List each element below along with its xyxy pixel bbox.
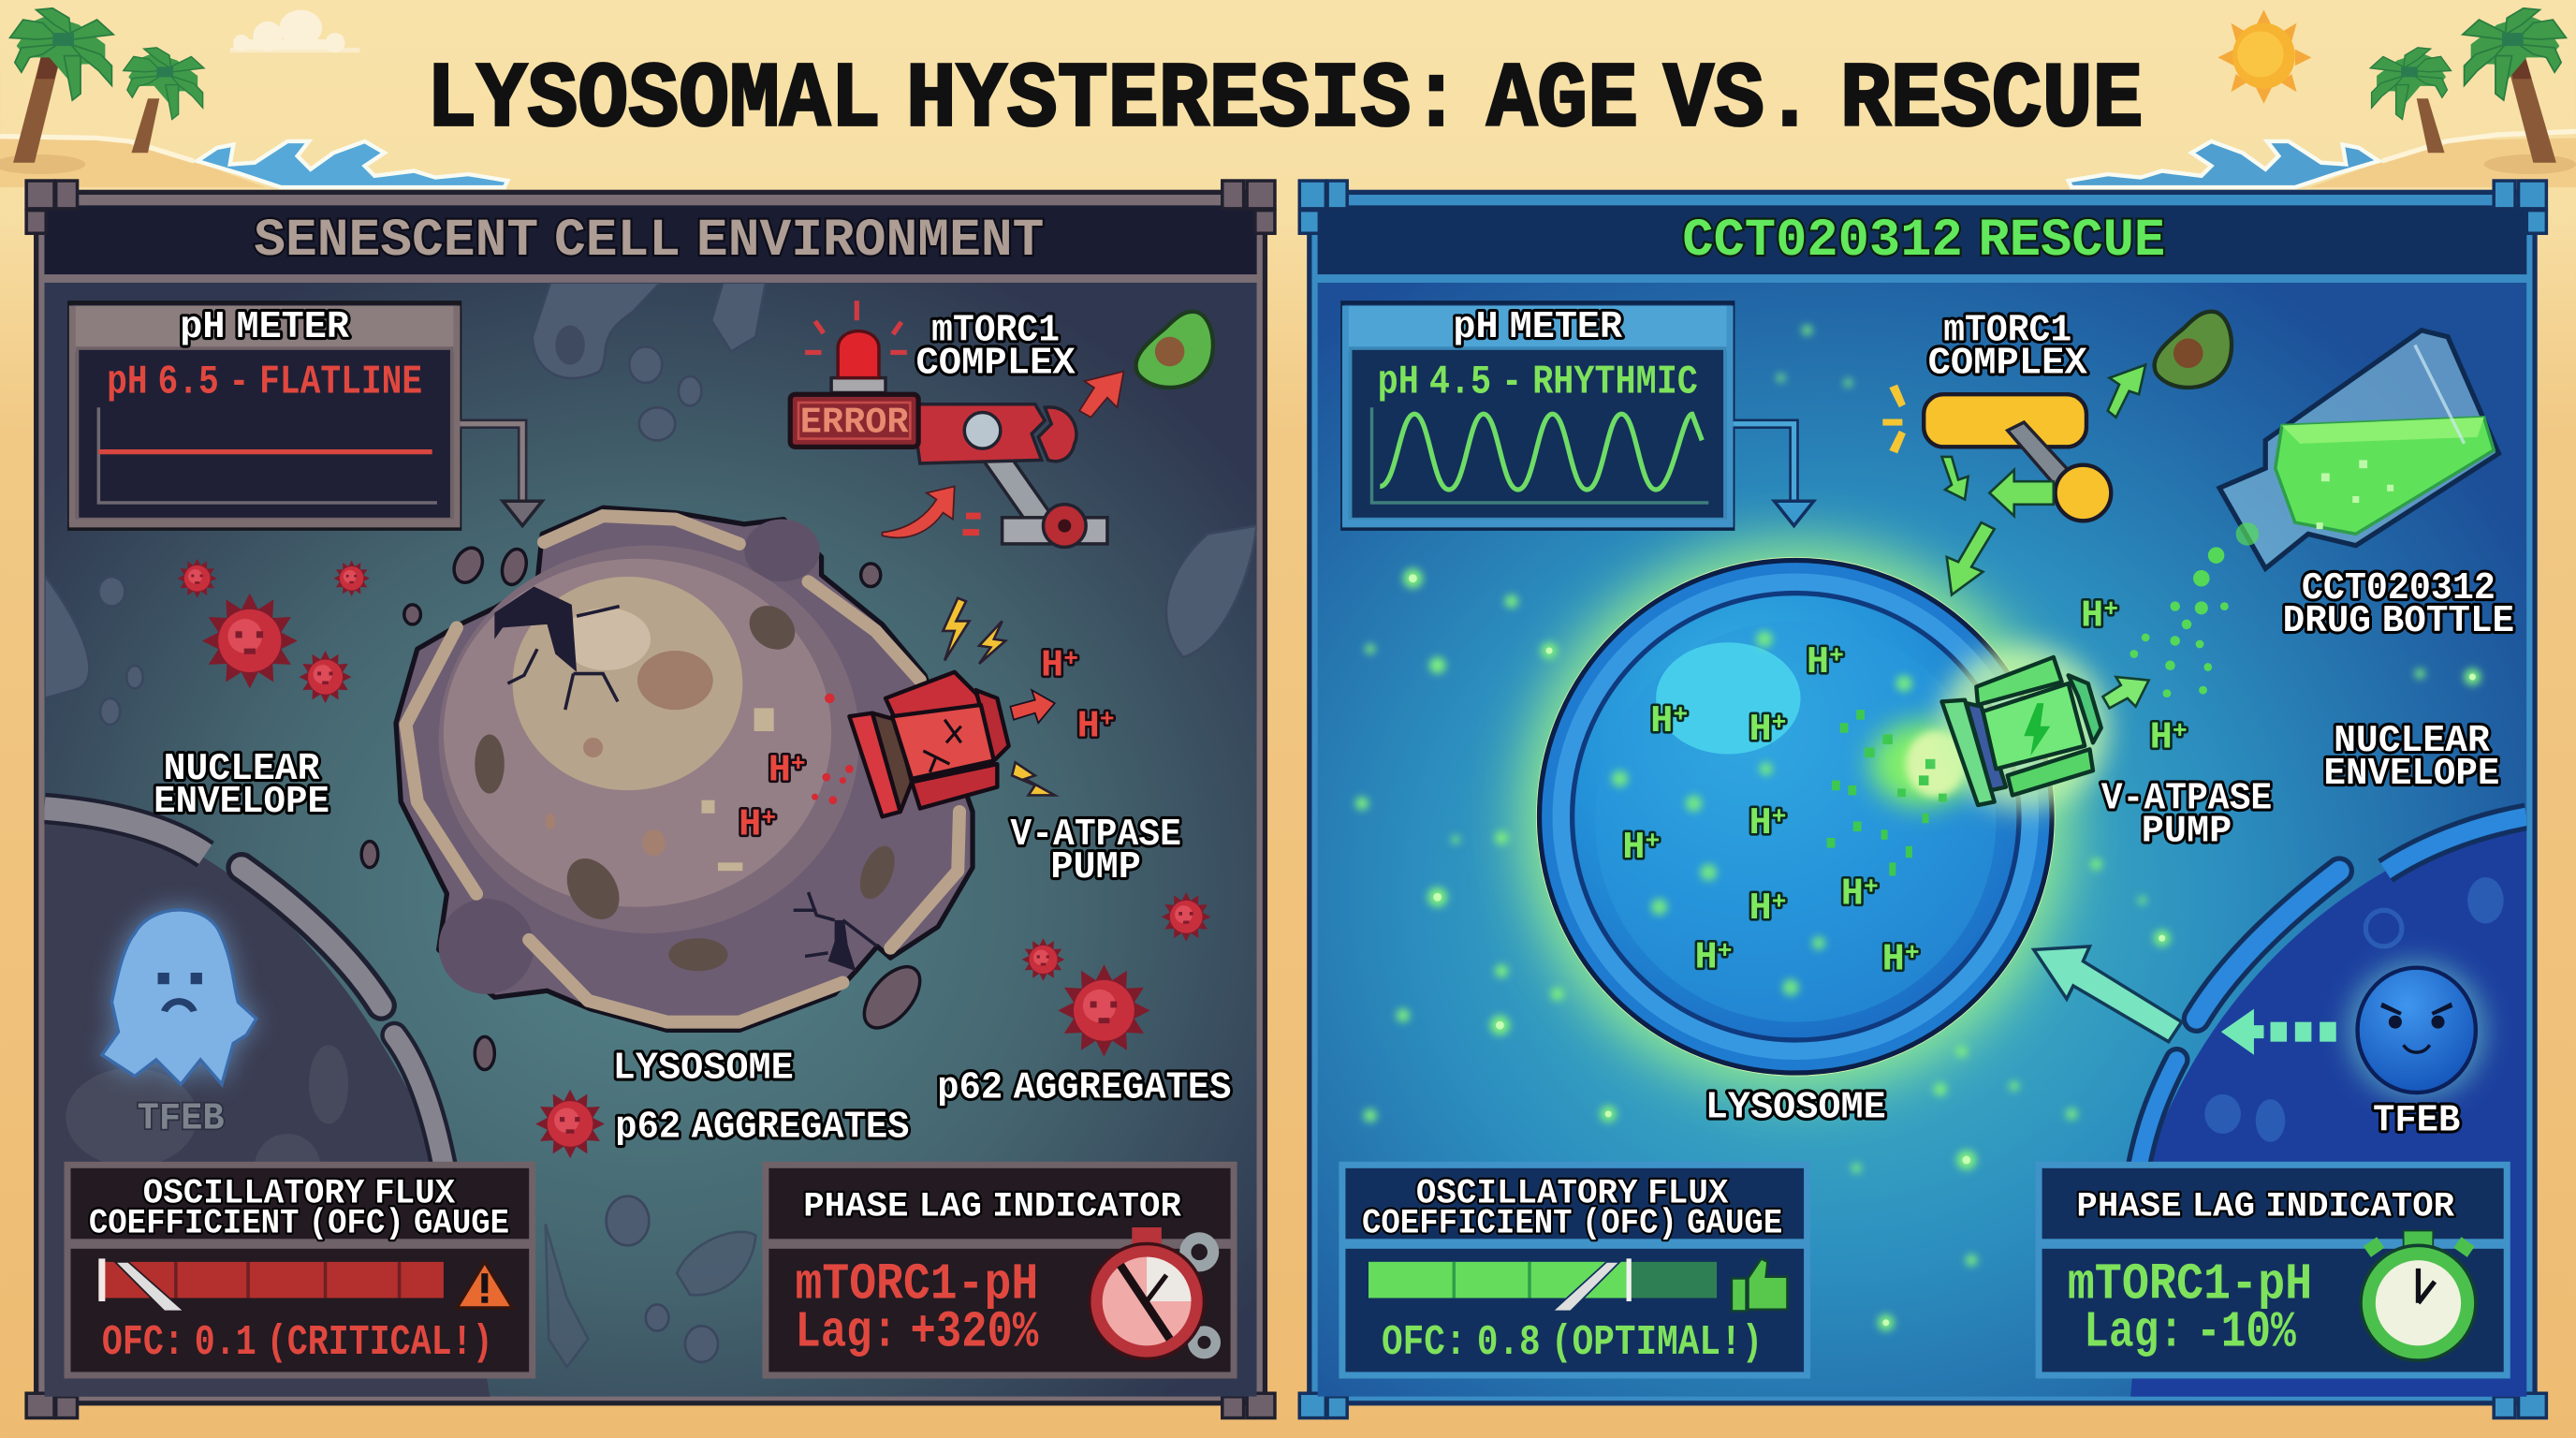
icon: sad ghost tfeb: [102, 910, 256, 1084]
heading: senescent: SENESCENT CELL ENVIRONMENT: [254, 211, 1044, 271]
red arrows: [883, 372, 1123, 537]
labels left: p62 AGGREGATES: [615, 1106, 909, 1149]
palm tree large right: [2463, 8, 2566, 163]
palm tree small left: [124, 48, 204, 153]
labels left: NUCLEAR: [164, 748, 320, 791]
palm tree large left: [10, 8, 113, 163]
proton spray: [1612, 631, 1975, 996]
tfeb label dim: TFEB: [138, 1098, 225, 1141]
error badge: [790, 394, 918, 447]
h+ labels inside: H: [1807, 641, 1829, 684]
phase lag indicator left: PHASE LAG INDICATOR: [803, 1188, 1182, 1227]
h+ labels outside: +: [2103, 595, 2118, 624]
h+ labels left: H: [739, 804, 761, 847]
floating green particles: [1355, 325, 2481, 1331]
h+ labels left: [739, 644, 1115, 847]
labels left: [154, 748, 1231, 1149]
lysosome left: [361, 507, 973, 1070]
cracks: [494, 587, 877, 971]
h+ labels inside: H: [1695, 937, 1718, 980]
ofc gauge right: [1342, 1165, 1808, 1375]
labels right: LYSOSOME: [1705, 1086, 1886, 1129]
ph meter left: pH 6.5 - FLATLINE: [107, 359, 422, 405]
mtorc1 label left: COMPLEX: [915, 342, 1076, 385]
icon: thumbs up: [1732, 1258, 1788, 1312]
labels left: LYSOSOME: [613, 1047, 794, 1090]
h+ labels left: +: [791, 750, 806, 778]
ph meter left: [69, 302, 460, 529]
beach scene right: [2069, 8, 2576, 187]
phase lag indicator right: Lag: -10%: [2084, 1304, 2296, 1361]
h+ labels inside: H: [1749, 888, 1772, 931]
error badge: ERROR: [800, 403, 909, 444]
mtorc1 label right: mTORC1: [1943, 309, 2071, 352]
labels left: V-ATPASE: [1010, 814, 1181, 857]
drug bottle: [2219, 330, 2498, 568]
panel: senescent cell environment: [26, 181, 1275, 1418]
ofc gauge left: OFC: 0.1 (CRITICAL!): [102, 1318, 493, 1367]
arrow: nucleus to lysosome: [2034, 946, 2182, 1042]
h+ labels left: +: [1100, 706, 1115, 734]
labels right: PUMP: [2142, 811, 2232, 854]
ofc gauge right: COEFFICIENT (OFC) GAUGE: [1362, 1204, 1782, 1243]
connector arrow left: [460, 424, 542, 526]
ph meter left: pH METER: [180, 306, 350, 349]
rhythmic wave: [1380, 414, 1702, 490]
mtorc1 complex working: [1882, 309, 2232, 594]
h+ labels inside: +: [1772, 709, 1786, 737]
h+ labels inside: [1622, 641, 1920, 981]
h+ labels left: +: [1063, 645, 1078, 673]
panel frame left: [26, 181, 1275, 1418]
h+ labels left: H: [1077, 705, 1100, 748]
h+ labels left: H: [1041, 644, 1063, 687]
h+ labels inside: +: [1905, 939, 1920, 967]
phase lag indicator right: mTORC1-pH: [2068, 1256, 2312, 1313]
v-atpase pump broken: [849, 672, 1009, 816]
scene background right: [1318, 283, 2526, 1413]
h+ labels inside: H: [1650, 700, 1673, 743]
h+ labels inside: +: [1864, 873, 1879, 902]
labels right: DRUG BOTTLE: [2283, 600, 2514, 643]
icon: tfeb ball: [2348, 961, 2485, 1099]
icon: avocado left: [1135, 312, 1213, 388]
mtorc1 label left: mTORC1: [931, 309, 1060, 352]
icon: avocado right: [2155, 312, 2232, 388]
lightning bolts: [943, 598, 1055, 795]
phase lag indicator left: [766, 1165, 1234, 1375]
arm: [912, 404, 1045, 463]
labels right: NUCLEAR: [2334, 720, 2491, 763]
phase lag indicator right: PHASE LAG INDICATOR: [2076, 1188, 2455, 1227]
labels left: PUMP: [1050, 846, 1141, 889]
panel: cct020312 rescue: [1299, 181, 2546, 1418]
mtorc1 label right: COMPLEX: [1928, 342, 2088, 385]
labels right: V-ATPASE: [2101, 777, 2272, 820]
tan rim segments: [406, 516, 959, 1022]
h+ labels inside: H: [1841, 873, 1864, 916]
lysosome right: [1519, 540, 2071, 1093]
spark particles: [812, 694, 854, 804]
h+ labels inside: +: [1646, 828, 1660, 856]
h+ labels inside: H: [1749, 802, 1772, 845]
h+ labels inside: +: [1772, 888, 1786, 917]
icon: warning triangle: [457, 1262, 513, 1308]
lever: [970, 431, 1107, 547]
labels left: p62 AGGREGATES: [937, 1066, 1231, 1109]
ph meter right: pH 4.5 - RHYTHMIC: [1378, 359, 1698, 405]
membrane lobes: [439, 520, 820, 994]
scene background left: [44, 283, 1257, 1413]
p62 aggregates viruses: [178, 559, 1211, 1158]
h+ labels inside: H: [1622, 827, 1646, 870]
labels left: ENVELOPE: [154, 781, 329, 824]
h+ labels outside: H: [2150, 717, 2173, 760]
title: LYSOSOMAL HYSTERESIS: AGE VS. RESCUE: [426, 48, 2143, 153]
ofc gauge left: OSCILLATORY FLUX: [143, 1175, 456, 1214]
nucleus right: [2130, 814, 2526, 1413]
h+ labels inside: +: [1772, 802, 1786, 830]
labels right: CCT020312: [2302, 567, 2496, 610]
h+ labels left: +: [761, 804, 776, 832]
h+ labels inside: +: [1673, 700, 1688, 728]
connector arrow right: [1734, 424, 1814, 526]
gauge bar red: [98, 1258, 444, 1312]
h+ labels inside: H: [1882, 938, 1905, 981]
mtorc1 complex broken: [790, 301, 1213, 547]
wave left: [198, 141, 507, 187]
labels right: ENVELOPE: [2324, 753, 2499, 796]
cloud: [230, 10, 359, 52]
ofc gauge left: COEFFICIENT (OFC) GAUGE: [89, 1204, 509, 1243]
phase lag indicator left: Lag: +320%: [795, 1304, 1039, 1361]
mtorc1 label right: [1928, 309, 2088, 385]
heading: rescue: CCT020312 RESCUE: [1682, 211, 2165, 271]
phase lag indicator left: mTORC1-pH: [795, 1256, 1038, 1313]
h+ labels left: H: [768, 750, 791, 793]
ph meter right: pH METER: [1453, 306, 1623, 349]
labels right: [1705, 567, 2514, 1142]
panel frame right: [1299, 181, 2546, 1418]
ofc gauge right: OSCILLATORY FLUX: [1416, 1175, 1729, 1214]
nucleus left: [44, 805, 493, 1413]
beach scene left: [0, 8, 507, 187]
h+ labels inside: H: [1749, 709, 1772, 752]
icon: green stopwatch: [2361, 1231, 2476, 1360]
v-atpase pump green: [1939, 646, 2110, 810]
h+ labels outside: [2081, 595, 2188, 760]
icon: tfeb export arrow: [2221, 1009, 2336, 1055]
ofc gauge left: [67, 1165, 533, 1375]
palm tree small right: [2370, 48, 2451, 153]
flatline trace: [98, 449, 432, 454]
drug spray: [2130, 522, 2259, 697]
ofc gauge right: OFC: 0.8 (OPTIMAL!): [1382, 1318, 1763, 1367]
ph meter right: [1342, 302, 1734, 529]
phase lag indicator right: [2039, 1165, 2507, 1375]
h+ labels inside: +: [1829, 641, 1844, 669]
icon: broken stopwatch: [1090, 1227, 1221, 1358]
loose membrane debris: [361, 543, 930, 1070]
arrow from pump: [2102, 677, 2149, 708]
h+ labels outside: H: [2081, 595, 2103, 638]
mtorc1 label left: [915, 309, 1076, 385]
sun: [2217, 10, 2311, 104]
wave right: [2069, 141, 2378, 187]
icon: red siren: [831, 331, 886, 392]
labels right: TFEB: [2373, 1099, 2460, 1142]
h+ labels inside: +: [1718, 937, 1733, 965]
arrows from pump: [1010, 690, 1055, 723]
gauge bar green: [1368, 1258, 1717, 1312]
h+ labels outside: +: [2173, 717, 2188, 745]
